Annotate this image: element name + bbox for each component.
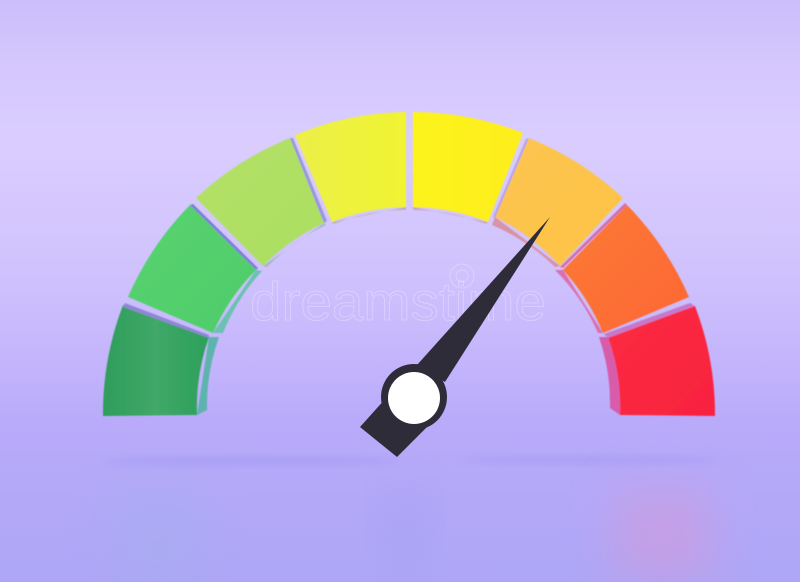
segment 1: dark green [103,303,219,416]
needle tail [360,398,428,457]
needle [360,217,550,457]
needle hub [381,364,447,430]
segment 2: green [128,204,262,333]
gauge arc [103,112,715,416]
segment 4: lime yellow [295,112,406,224]
segment 6: orange yellow [492,138,623,267]
watermark: dreamstime [250,272,546,332]
segment 5: yellow [413,112,523,224]
hub white centre [388,372,440,424]
floor shadows and reflections [100,456,720,580]
needle pointer [417,217,550,382]
segment 3: light green [196,138,327,267]
segment 8: red [599,303,715,416]
segment 7: orange [555,203,689,333]
